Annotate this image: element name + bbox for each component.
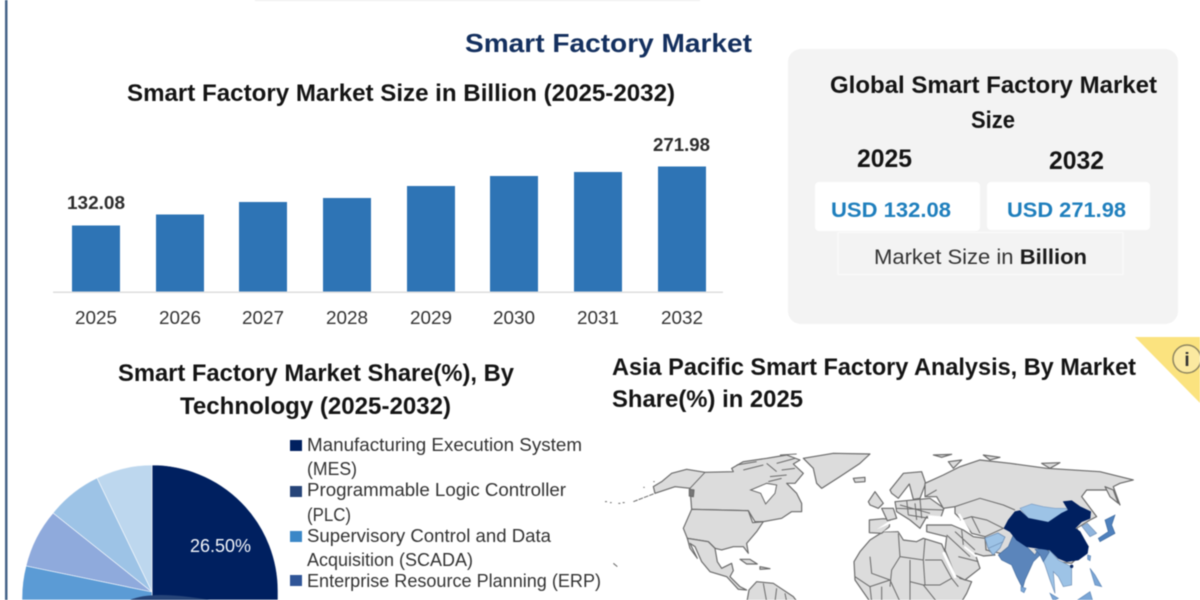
- legend item: PLC: [290, 480, 566, 525]
- legend item: SCADA: [290, 526, 552, 570]
- value box 2032: [987, 182, 1150, 230]
- section heading: Asia Pacific Smart Factory Analysis, By Market: [612, 354, 1136, 381]
- map: Pakistan and Afghanistan: [985, 533, 1005, 555]
- value box 2032: USD 271.98: [1007, 199, 1126, 222]
- legend item: PLC: Programmable Logic Controller: [307, 480, 566, 500]
- map: Hainan: [1070, 565, 1073, 568]
- section heading: Technology (2025-2032): [180, 393, 451, 420]
- year axis labels: 2031: [577, 308, 619, 328]
- left page border: [5, 0, 8, 600]
- panel: asia pacific analysis: [605, 354, 1136, 600]
- panel heading: Size: [971, 107, 1015, 134]
- panel heading: Global Smart Factory Market: [830, 72, 1157, 99]
- pie chart: [22, 465, 278, 600]
- panel: market size bar chart: [53, 80, 723, 328]
- bar value: 2032: 271.98: [653, 135, 710, 155]
- unit caption: Market Size in Billion: [874, 246, 1087, 269]
- pie label: 26.50%: [190, 536, 251, 556]
- map: South East Asia: [1040, 551, 1072, 593]
- map: China: [1004, 501, 1091, 562]
- map: Russia and Asia: [925, 454, 1133, 563]
- year 2025: 2025: [857, 145, 912, 173]
- year axis labels: 2030: [493, 308, 535, 328]
- legend item: SCADA: Supervisory Control and Data: [307, 526, 552, 546]
- section heading: Share(%) in 2025: [612, 386, 803, 413]
- legend: [290, 435, 601, 591]
- year axis labels: 2029: [410, 308, 452, 328]
- legend item: MES: [290, 435, 582, 479]
- map: Mediterranean and Black Sea: [877, 517, 948, 543]
- map: Japan: [1098, 515, 1115, 542]
- panel: global market size: [788, 49, 1178, 324]
- legend item: MES: (MES): [307, 459, 357, 479]
- value box 2025: USD 132.08: [831, 199, 951, 222]
- year 2032: 2032: [1049, 147, 1104, 175]
- legend item: ERP: Enterprise Resource Planning (ERP): [307, 571, 601, 591]
- map: Americas: [605, 453, 870, 600]
- section heading: [118, 360, 515, 420]
- map: Europe, Africa and Middle East: [854, 472, 995, 600]
- legend item: SCADA: Acquisition (SCADA): [307, 550, 473, 570]
- year axis labels: [75, 308, 703, 328]
- value box 2025: [815, 182, 980, 231]
- bar chart: [72, 166, 706, 292]
- map: India: [998, 533, 1045, 588]
- year axis labels: 2026: [159, 308, 201, 328]
- map: South Korea: [1082, 523, 1097, 537]
- chart heading: Smart Factory Market Size in Billion (2025-2032): [127, 80, 675, 107]
- legend item: MES: Manufacturing Execution System: [307, 435, 582, 455]
- section heading: Smart Factory Market Share(%), By: [118, 360, 515, 387]
- year axis labels: 2025: [75, 308, 117, 328]
- map: Asia Pacific highlights: [988, 501, 1115, 600]
- year axis labels: 2027: [242, 308, 284, 328]
- year axis labels: 2028: [326, 308, 368, 328]
- title: Smart Factory Market: [465, 28, 752, 58]
- world map: [605, 453, 1133, 600]
- legend item: PLC: (PLC): [307, 505, 351, 525]
- year axis labels: 2032: [661, 308, 703, 328]
- section heading: [612, 354, 1136, 413]
- unit caption: [838, 232, 1123, 274]
- panel: market share by technology: [22, 360, 601, 600]
- icon: info badge: i: [1184, 350, 1190, 371]
- map: Afghanistan border: [988, 542, 1003, 548]
- map: Mongolia: [1020, 504, 1068, 522]
- map: islands: [1021, 555, 1102, 600]
- icon: info badge: [1135, 337, 1200, 403]
- panel heading: [830, 72, 1157, 134]
- bar value: 2025: 132.08: [67, 193, 125, 213]
